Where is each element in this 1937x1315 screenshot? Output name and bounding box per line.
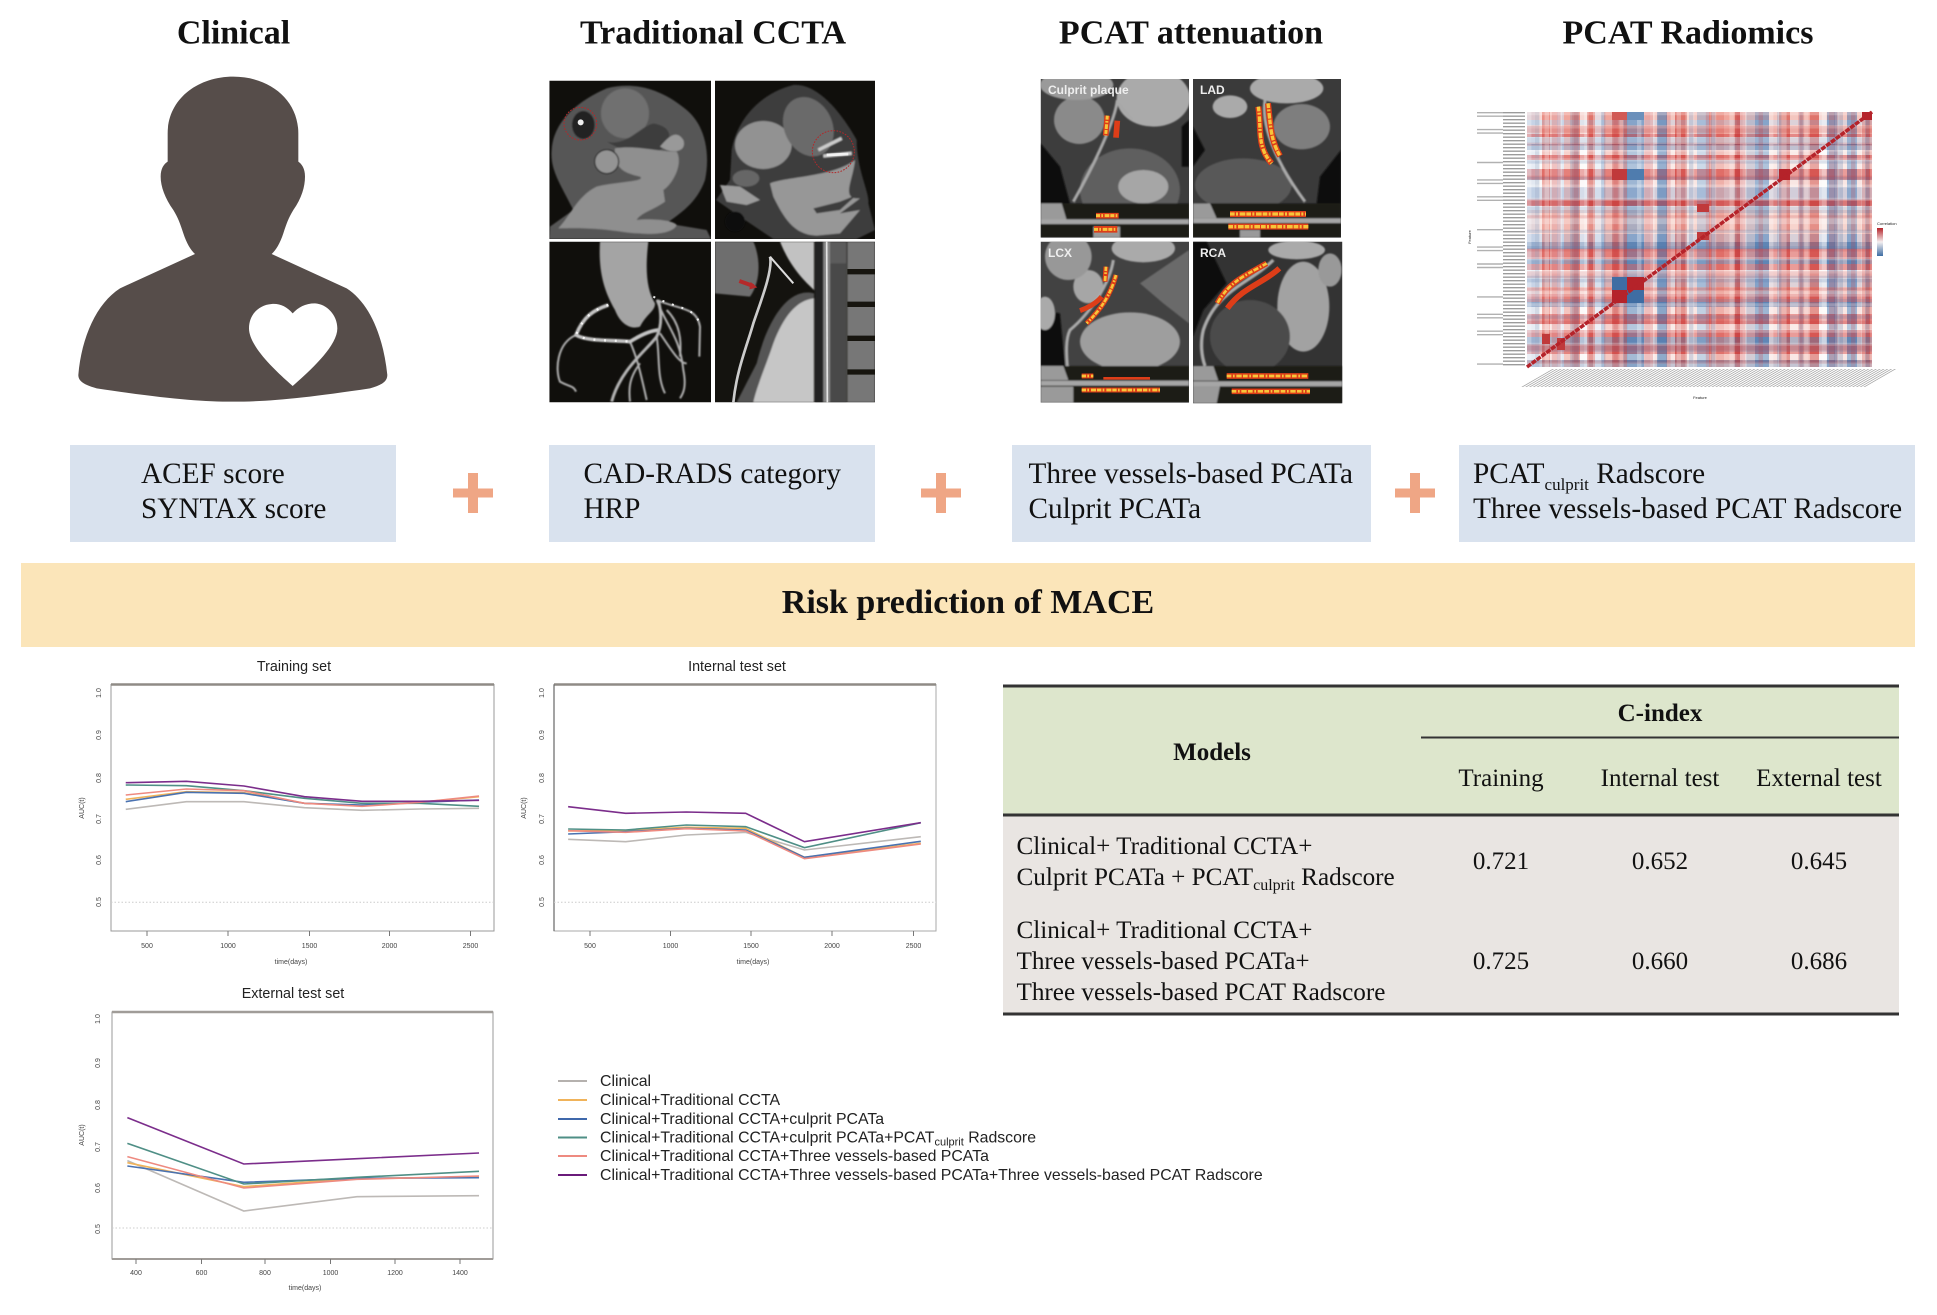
label: LAD: LAD — [1200, 83, 1225, 97]
chart: Internal test set: 2500 — [906, 943, 921, 950]
scan: RCA — [1193, 242, 1342, 404]
chart: Training set: 500 — [141, 943, 153, 950]
chart: Internal test set: 0.6 — [539, 855, 546, 865]
icon: plus 3 — [1395, 473, 1435, 513]
panel: clinical variables: ACEF score — [141, 458, 285, 490]
chart: External test set: External test set — [242, 986, 344, 1002]
chart: External test set: 0.8 — [95, 1100, 102, 1110]
chart: Training set: time(days) — [275, 959, 307, 966]
heatmap legend: Correlation — [1877, 221, 1897, 226]
chart: Internal test set: 1.0 — [539, 688, 546, 698]
legend: model lines: Clinical+Traditional CCTA+Three vessels-based PCATa — [600, 1148, 989, 1165]
chart: Internal test set: Internal test set — [688, 659, 786, 675]
heading: Traditional CCTA: Traditional CCTA — [580, 14, 846, 52]
table: C-index of models — [1003, 686, 1899, 1014]
heatmap cells — [1527, 112, 1872, 367]
heatmap legend — [1877, 221, 1897, 256]
legend: model lines: Radscore — [964, 1130, 1036, 1146]
table header: Models — [1173, 739, 1251, 766]
panel: PCAT attenuation variables — [1012, 445, 1371, 542]
heatmap fine plaid texture — [1527, 112, 1872, 367]
table header: C-index — [1618, 700, 1703, 727]
table body: Three vessels-based PCAT Radscore — [1016, 979, 1385, 1006]
heatmap strong blocks — [1542, 112, 1872, 350]
image panel: PCAT attenuation scans — [1035, 70, 1342, 403]
chart: External test set: 1200 — [387, 1270, 403, 1277]
table header: External test — [1756, 765, 1882, 792]
label: LCX: LCX — [1048, 246, 1072, 260]
panel: traditional CCTA variables — [549, 445, 875, 542]
panel: traditional CCTA variables: HRP — [584, 493, 640, 525]
scan: LCX — [1040, 242, 1189, 403]
table body: 0.725 — [1473, 948, 1529, 975]
legend: model lines: Clinical+Traditional CCTA — [600, 1092, 780, 1109]
table body: 0.652 — [1632, 848, 1688, 875]
heading: Clinical: Clinical — [177, 14, 290, 52]
panel: PCAT attenuation variables: Culprit PCATa — [1028, 493, 1201, 525]
chart: External test set: 600 — [196, 1270, 207, 1277]
panel: PCAT attenuation variables: Three vessels-based PCATa — [1028, 458, 1353, 490]
chart: Training set: Training set — [257, 659, 331, 675]
chart: Training set: AUC(t) — [79, 797, 86, 819]
heatmap axis labels: Feature — [1693, 395, 1708, 400]
chart: Internal test set: 0.9 — [539, 730, 546, 740]
chart: Training set: 0.8 — [96, 773, 103, 783]
table body: 0.686 — [1791, 948, 1847, 975]
chart: Internal test set: 0.8 — [539, 773, 546, 783]
icon: plus 1 — [453, 473, 493, 513]
label: Culprit plaque: Culprit plaque — [1048, 83, 1129, 97]
heatmap column labels — [1537, 369, 1882, 387]
chart: External test set: 400 — [130, 1270, 142, 1277]
table body: Three vessels-based PCATa+ — [1016, 948, 1310, 975]
chart: Training set: 0.9 — [96, 730, 103, 740]
chart: Training set — [79, 659, 494, 966]
table header: Internal test — [1601, 765, 1719, 792]
table body: Radscore — [1295, 864, 1395, 891]
chart: Internal test set: 0.5 — [539, 897, 546, 907]
heatmap diagonal — [1527, 112, 1872, 367]
heatmap row bands — [1527, 112, 1872, 367]
table body: 0.660 — [1632, 948, 1688, 975]
chart: External test set: time(days) — [289, 1285, 321, 1292]
chart: Training set: 0.6 — [96, 855, 103, 865]
legend: model lines: culprit — [934, 1136, 964, 1148]
panel: PCAT radiomics variables: Radscore — [1589, 458, 1705, 490]
chart: External test set: 1000 — [323, 1270, 338, 1277]
scan: curved planar reformat with red arrow — [715, 242, 875, 402]
chart: Internal test set: 2000 — [824, 943, 840, 950]
table body: 0.645 — [1791, 848, 1847, 875]
chart: Training set: 0.7 — [96, 814, 103, 824]
chart: Internal test set: 500 — [584, 943, 596, 950]
chart: External test set: 800 — [259, 1270, 271, 1277]
chart: External test set: AUC(t) — [79, 1124, 86, 1146]
scan: LAD — [1193, 79, 1341, 238]
legend: model lines — [558, 1073, 1263, 1184]
chart: Training set: 1.0 — [96, 688, 103, 698]
chart: External test set: 0.9 — [95, 1058, 102, 1068]
image panel: traditional CCTA scans — [549, 81, 875, 402]
scan: axial slice with circled calcified vessel — [715, 80, 875, 239]
banner: Risk prediction of MACE: Risk prediction of MACE — [782, 584, 1154, 621]
chart: External test set: 0.6 — [95, 1183, 102, 1193]
legend: model lines: Clinical+Traditional CCTA+Three vessels-based PCATa+Three vessels-based PCAT Radscore — [600, 1167, 1263, 1184]
table body: 0.721 — [1473, 848, 1529, 875]
chart: Internal test set: 0.7 — [539, 814, 546, 824]
panel: traditional CCTA variables: CAD-RADS category — [584, 458, 841, 490]
icon: person with heart — [78, 77, 387, 402]
chart: External test set: 0.5 — [95, 1224, 102, 1234]
legend: model lines: Clinical+Traditional CCTA+culprit PCATa+PCAT — [600, 1130, 934, 1146]
table body: culprit — [1253, 877, 1295, 894]
panel: PCAT radiomics variables — [1459, 445, 1915, 542]
table body: Clinical+ Traditional CCTA+ — [1016, 917, 1312, 944]
heading: PCAT Radiomics: PCAT Radiomics — [1563, 14, 1813, 52]
chart: Training set: 2000 — [382, 943, 397, 950]
label: RCA: RCA — [1200, 246, 1226, 260]
table body: Culprit PCATa + PCAT — [1016, 864, 1253, 891]
panel: clinical variables — [70, 445, 396, 542]
heatmap row labels — [1490, 112, 1514, 367]
icon: plus 2 — [921, 473, 961, 513]
chart: External test set: 0.7 — [95, 1142, 102, 1152]
table header: Training — [1458, 765, 1544, 792]
panel: PCAT radiomics variables: culprit — [1545, 475, 1589, 494]
scan: coronary tree rendering — [549, 242, 711, 402]
chart: Training set: 2500 — [463, 943, 478, 950]
legend: model lines: Clinical — [600, 1073, 651, 1090]
chart: External test set — [79, 986, 493, 1292]
panel: PCAT radiomics variables: Three vessels-based PCAT Radscore — [1473, 493, 1902, 525]
heatmap axis labels — [1467, 229, 1708, 400]
chart: Training set: 1500 — [302, 943, 317, 950]
heatmap: radiomics feature correlation matrix — [1467, 112, 1897, 400]
chart: Training set: 0.5 — [96, 897, 103, 907]
banner: Risk prediction of MACE — [21, 563, 1915, 647]
chart: Internal test set: AUC(t) — [521, 797, 528, 819]
chart: Internal test set: 1000 — [663, 943, 678, 950]
chart: Internal test set: 1500 — [743, 943, 759, 950]
chart: External test set: 1.0 — [95, 1014, 102, 1024]
chart: Internal test set: time(days) — [737, 959, 769, 966]
chart: Internal test set — [521, 659, 936, 966]
panel: PCAT radiomics variables: PCAT — [1473, 458, 1545, 490]
table body: Clinical+ Traditional CCTA+ — [1016, 833, 1312, 860]
table body — [1003, 815, 1899, 1014]
legend: model lines: Clinical+Traditional CCTA+culprit PCATa — [600, 1111, 884, 1128]
scan: culprit plaque — [1040, 79, 1189, 238]
heatmap axis labels: Feature — [1467, 229, 1472, 244]
heading: PCAT attenuation: PCAT attenuation — [1059, 14, 1323, 52]
scan: axial slice with circled plaque — [549, 80, 711, 239]
panel: clinical variables: SYNTAX score — [141, 493, 326, 525]
chart: Training set: 1000 — [220, 943, 236, 950]
table header — [1003, 686, 1899, 815]
chart: External test set: 1400 — [452, 1270, 468, 1277]
